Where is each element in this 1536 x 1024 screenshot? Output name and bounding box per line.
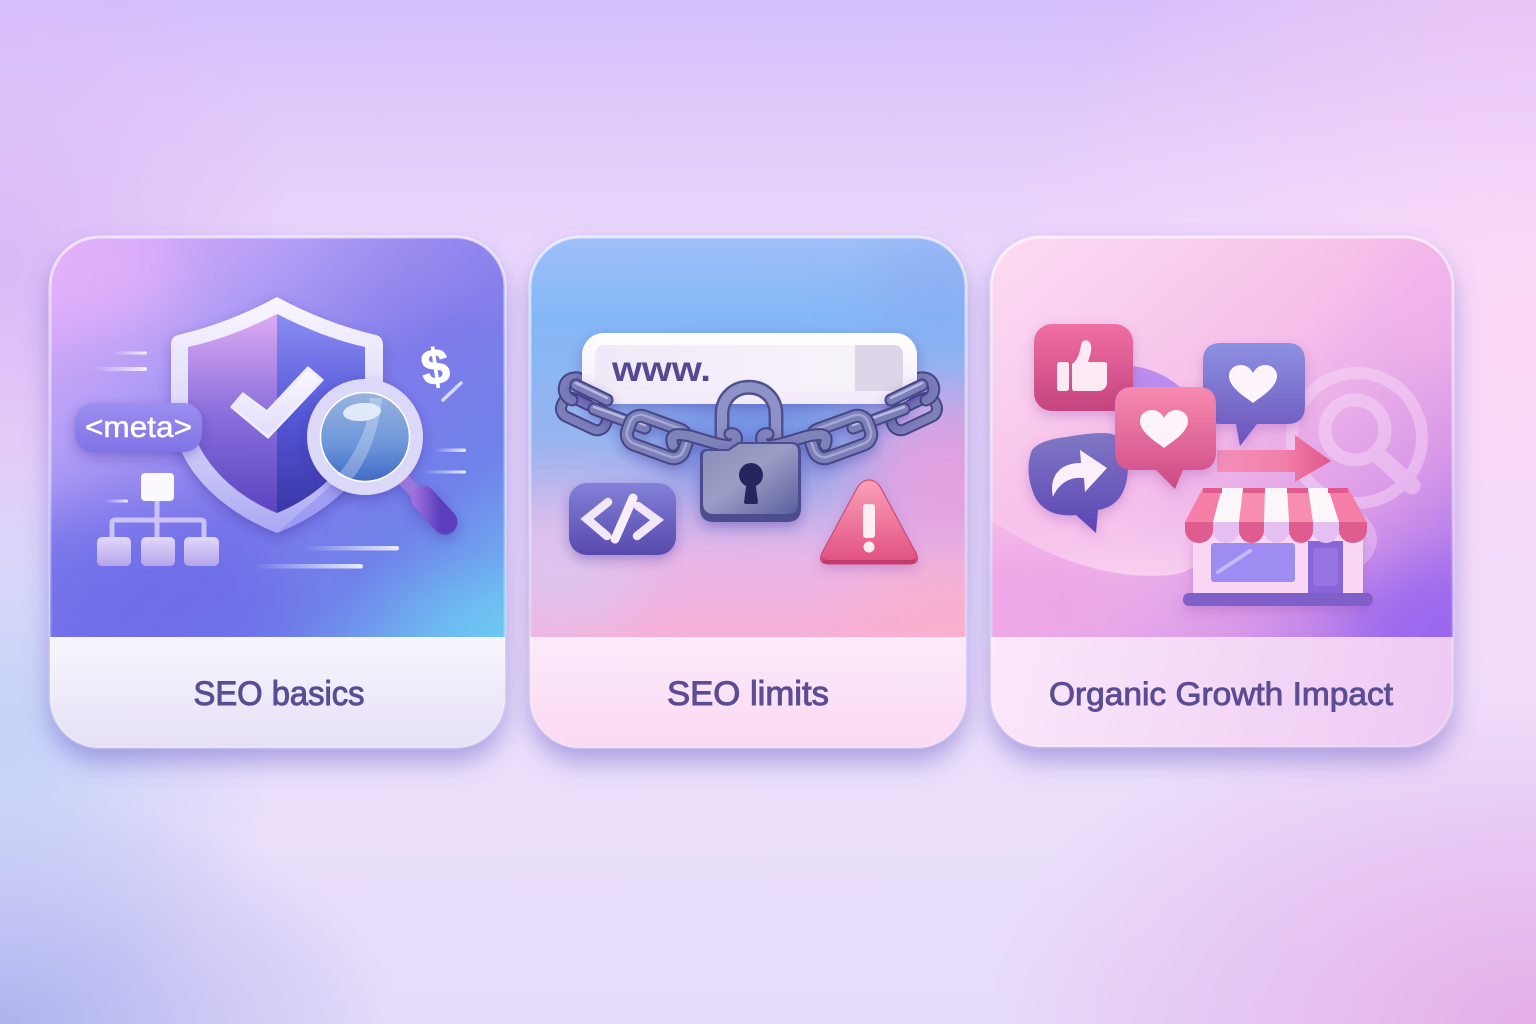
ghost magnifier [1292,373,1422,503]
tag: meta: <meta> [85,411,192,444]
pale cloud behind store [1193,492,1377,588]
icon: warning triangle [821,480,917,564]
card 3 illustration background [991,237,1453,637]
awning [1185,488,1367,543]
background blob upper [1130,366,1210,425]
label: SEO limits: SEO limits [667,675,829,713]
URL bar: www. [611,350,711,389]
icon: magnifying glass [307,379,445,522]
icon: thumbs up bubble [1034,324,1133,411]
icon: code brackets [569,483,676,555]
padlock body [700,442,801,522]
label: Organic Growth Impact: Organic Growth Impact [1049,676,1393,712]
icon: blue heart bubble [1203,343,1305,446]
icon: dollar sign: $ [418,337,453,397]
icon: shield [171,297,383,533]
card 2 illustration background [530,237,966,637]
card 3 body [991,237,1453,747]
background blob lower [992,507,1214,576]
arrow [1217,435,1331,482]
tag: meta [75,403,202,452]
icon: share bubble [1028,433,1128,533]
card 1 illustration background [50,237,505,637]
chain ends behind bar [558,378,940,433]
card 1 edge [50,237,505,748]
panel: Organic Growth Impact [976,234,1469,775]
icon: site hierarchy [97,473,219,566]
label: SEO basics: SEO basics [194,675,364,713]
icon: storefront [1183,488,1373,606]
panel: SEO basics [36,236,520,776]
chain [576,383,922,461]
card 2 edge [530,237,966,748]
card 1 body [50,237,505,748]
card 3 edge [991,237,1453,747]
card 2 body [530,237,966,748]
speed lines [93,352,466,568]
infographic canvas [36,234,1469,776]
icon: pink heart bubble [1115,387,1216,489]
URL bar [582,333,917,404]
panel: SEO limits [516,236,981,776]
padlock shackle [722,387,776,445]
